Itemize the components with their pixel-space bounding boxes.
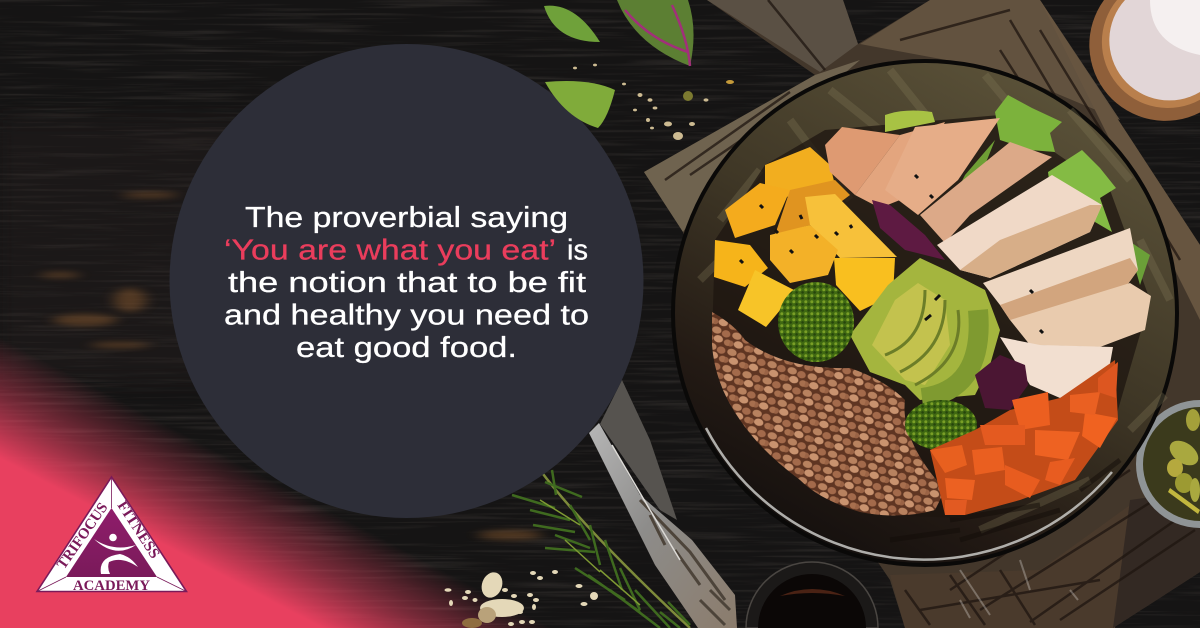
pink corner wash	[0, 300, 628, 628]
quote text: eat good food.	[296, 332, 517, 364]
avocado	[850, 258, 1000, 400]
icon: salt bowl	[1089, 0, 1200, 121]
knife	[589, 380, 737, 628]
quote text: the notion that to be fit	[228, 267, 586, 299]
food bowl	[671, 59, 1179, 567]
icon: sauce bowl	[746, 562, 878, 628]
quote text: ‘You are what you eat’	[224, 234, 556, 266]
lettuce	[885, 95, 1150, 285]
icon: basil leaf top	[544, 6, 600, 42]
logo figure	[94, 534, 138, 574]
quote text: The proverbial saying	[245, 202, 568, 234]
icon: pistachio bowl	[1136, 400, 1200, 528]
black sesame on food	[740, 175, 1043, 333]
glass bowl	[671, 59, 1179, 567]
handle	[589, 423, 737, 628]
blade	[600, 380, 677, 520]
logo: Trifocus Fitness Academy	[37, 477, 186, 594]
shadow under food	[712, 115, 1150, 518]
scattered seeds	[573, 64, 734, 140]
wooden serving board	[644, 0, 1200, 628]
broccoli	[778, 282, 977, 450]
quote text	[224, 202, 589, 364]
sesame pile	[444, 569, 598, 628]
logo wordmark	[54, 498, 162, 594]
radicchio	[872, 200, 945, 260]
red cabbage	[975, 355, 1028, 410]
icon: basil leaf lower	[545, 81, 615, 128]
rosemary sprig	[512, 470, 690, 628]
callout circle	[170, 44, 644, 518]
roasted mango	[714, 147, 897, 327]
buckwheat	[712, 312, 945, 516]
icon: purple basil leaf	[617, 0, 694, 66]
logo wordmark: ACADEMY	[73, 578, 151, 594]
quote text: is	[567, 234, 588, 266]
quote text: and healthy you need to	[224, 300, 589, 332]
chicken slices	[825, 118, 1151, 398]
carrots	[930, 360, 1118, 515]
logo wordmark: TRIFOCUS	[54, 500, 111, 572]
logo wordmark: FITNESS	[114, 498, 162, 562]
